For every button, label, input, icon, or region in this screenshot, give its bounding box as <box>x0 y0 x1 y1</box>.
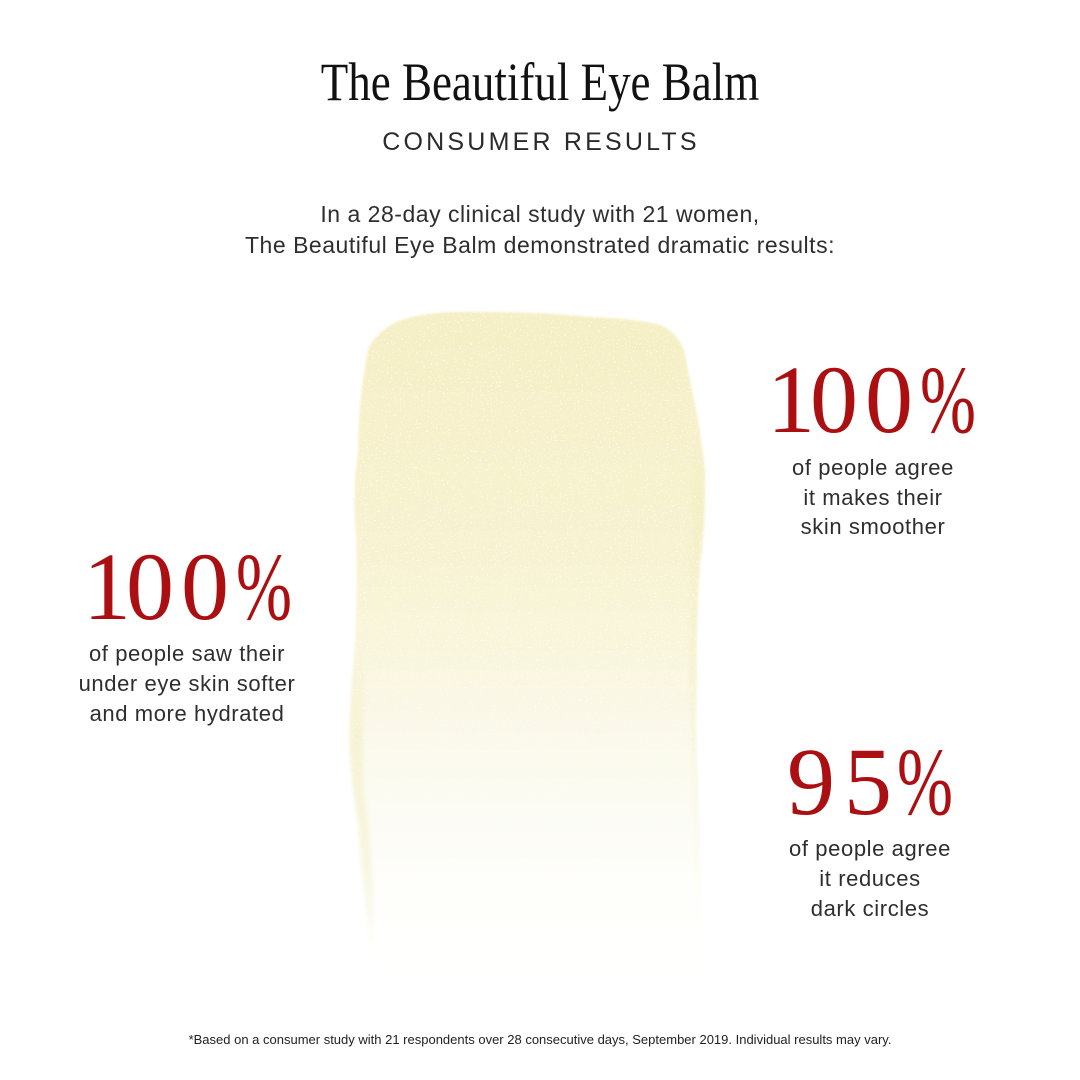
stat: dark circles: it reduces <box>819 866 921 890</box>
stat: smoother skin: it makes their <box>803 484 943 510</box>
stat: smoother skin: % <box>920 346 976 453</box>
title: The Beautiful Eye Balm <box>321 52 759 112</box>
stat: softer and hydrated: under eye skin softer <box>79 670 295 696</box>
stat: softer and hydrated: % <box>236 533 292 640</box>
stat: smoother skin: 1 <box>767 346 815 453</box>
stat: smoother skin <box>767 346 976 539</box>
stat: softer and hydrated: and more hydrated <box>90 700 284 726</box>
stat: dark circles: 9 <box>787 728 835 835</box>
stat: softer and hydrated: 0 <box>126 533 174 640</box>
stat: dark circles: dark circles <box>811 896 929 920</box>
stat: softer and hydrated: 1 <box>83 533 131 640</box>
stat: dark circles: % <box>897 728 953 835</box>
stat: smoother skin: skin smoother <box>801 514 945 539</box>
subtitle: CONSUMER RESULTS <box>382 128 700 156</box>
intro text <box>245 201 835 258</box>
stat: smoother skin: 0 <box>810 346 858 453</box>
intro text: The Beautiful Eye Balm demonstrated dramatic results: <box>245 232 835 258</box>
balm swatch <box>348 310 706 931</box>
stat: softer and hydrated <box>79 533 295 726</box>
stat: dark circles: 5 <box>844 728 892 835</box>
stat: softer and hydrated: 0 <box>181 533 229 640</box>
stat: dark circles: of people agree <box>789 836 951 860</box>
stat: softer and hydrated: of people saw their <box>89 640 285 666</box>
intro text: In a 28-day clinical study with 21 women, <box>320 201 760 227</box>
stat: dark circles <box>787 728 953 920</box>
stat: smoother skin: of people agree <box>792 455 954 480</box>
footnote: *Based on a consumer study with 21 respondents over 28 consecutive days, September 2019. Individual results may vary. <box>189 1032 891 1047</box>
stat: smoother skin: 0 <box>865 346 913 453</box>
